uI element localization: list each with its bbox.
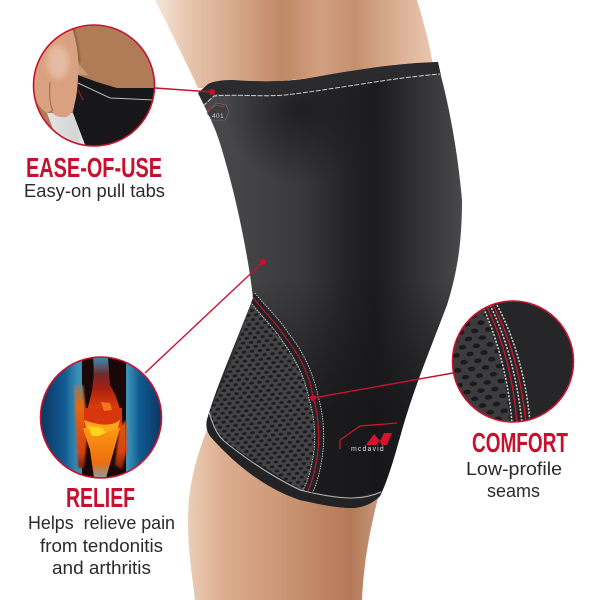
connector dot <box>260 259 266 265</box>
description: Helps relieve pain <box>28 513 175 533</box>
circle border <box>34 25 154 146</box>
description: seams <box>487 481 540 501</box>
description <box>28 513 175 578</box>
description: Easy-on pull tabs <box>24 181 165 201</box>
inset photo: seam closeup <box>453 301 575 423</box>
knee sleeve body <box>198 62 462 508</box>
bottom stitching <box>209 412 381 498</box>
description: and arthritis <box>52 558 151 578</box>
heading: EASE-OF-USE <box>26 152 162 183</box>
inset image: knee joint <box>40 357 162 479</box>
connector line <box>313 373 453 398</box>
bottom band <box>200 412 382 510</box>
photo: leg wearing knee sleeve <box>155 0 470 600</box>
thigh skin <box>155 0 433 88</box>
small size tag 401: 401 <box>212 113 224 120</box>
callout: ease-of-use <box>24 24 215 201</box>
circle border <box>452 301 574 422</box>
white backdrop and fabric <box>47 113 85 144</box>
description <box>466 459 562 501</box>
top band <box>198 62 441 104</box>
hand <box>33 28 78 117</box>
connector dot <box>209 89 215 95</box>
connector line <box>145 262 263 373</box>
top stitching <box>203 74 440 106</box>
red seam <box>249 293 324 492</box>
mesh panel <box>204 298 318 500</box>
inset photo: pull tab <box>33 24 155 150</box>
description: Low-profile <box>466 459 562 479</box>
circle border <box>40 357 162 478</box>
connector line <box>155 88 212 92</box>
connector dot <box>310 395 316 401</box>
small size tag 401 <box>207 103 229 120</box>
callout: comfort <box>310 301 575 501</box>
description: from tendonitis <box>40 536 163 556</box>
calf skin <box>188 430 378 600</box>
heading: RELIEF <box>66 482 135 513</box>
callout: relief <box>28 259 266 578</box>
brand logo <box>340 423 397 453</box>
brand logo: mcdavid <box>351 446 385 453</box>
